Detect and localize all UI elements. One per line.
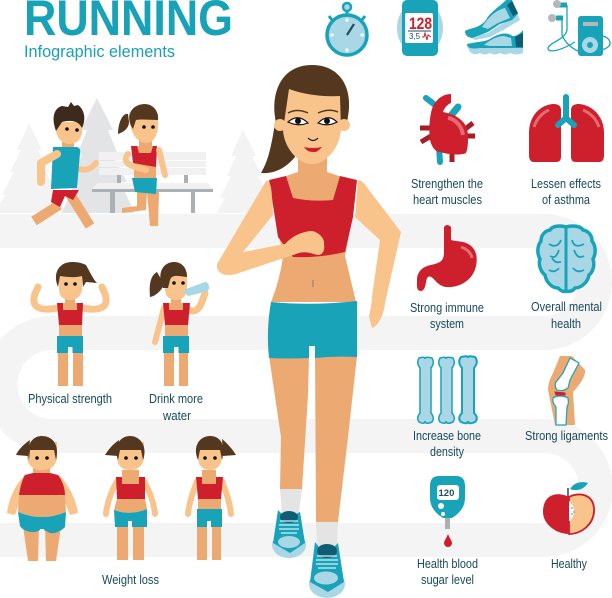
figure: medium woman [105, 436, 155, 560]
figure: overweight woman [7, 436, 78, 561]
label: brain: health [551, 317, 581, 331]
figure: physical strength [34, 262, 106, 386]
label: drink more water: Drink more [149, 392, 203, 406]
illustration: runners in park [0, 98, 275, 226]
icon: fitness watch: 3,5 [409, 32, 421, 41]
label: physical strength: Physical strength [28, 392, 112, 406]
water bottle [183, 282, 209, 296]
icon: apple [543, 482, 594, 534]
icon: knee [548, 356, 585, 425]
label: lungs [531, 177, 601, 207]
label: glucose meter [417, 557, 478, 587]
figure: drink more water [150, 262, 209, 386]
label: heart [411, 177, 483, 207]
right arm [355, 180, 401, 328]
left shoe [272, 510, 306, 558]
label: stomach [410, 301, 484, 331]
label: drink more water [149, 392, 203, 423]
label: brain [531, 300, 602, 331]
bench [92, 152, 213, 213]
icon: lungs [529, 97, 604, 162]
navel [312, 280, 314, 287]
man runner [34, 102, 96, 226]
face [274, 89, 350, 164]
icon: glucose meter: 120 [438, 488, 454, 499]
icon: brain [538, 226, 595, 292]
label: bones [413, 429, 481, 459]
label: bones: Increase bone [413, 429, 481, 443]
torso [271, 158, 356, 302]
legs [269, 356, 357, 522]
label: brain: Overall mental [531, 300, 602, 314]
label: heart: heart muscles [413, 193, 482, 207]
label: stomach: system [430, 317, 464, 331]
left arm [217, 181, 324, 275]
ponytail and hair [261, 118, 295, 173]
icon: music player with earphones [548, 0, 610, 56]
figure: slim woman [188, 436, 236, 560]
main woman figure [217, 65, 401, 598]
label: lungs: Lessen effects [531, 177, 601, 191]
icon: heart [420, 94, 475, 162]
icon: glucose meter [430, 476, 465, 547]
winding background path [0, 231, 596, 540]
label: weight loss: Weight loss [102, 573, 159, 587]
right shoe [309, 542, 345, 598]
icon: stopwatch [327, 3, 367, 55]
label: glucose meter: Health blood [417, 557, 478, 571]
icon: bones [418, 356, 477, 423]
subtitle: Infographic elements [24, 42, 175, 61]
icon: fitness watch: 128 [409, 14, 432, 33]
label: glucose meter: sugar level [421, 573, 474, 587]
socks [280, 489, 338, 546]
icon: fitness watch [397, 0, 443, 56]
shorts [268, 301, 357, 358]
woman runner [118, 104, 165, 226]
label: drink more water: water [162, 409, 191, 423]
label: lungs: of asthma [542, 193, 590, 207]
label: stomach: Strong immune [410, 301, 484, 315]
icon: running shoes [465, 0, 523, 54]
label: heart: Strengthen the [411, 177, 483, 191]
trees [0, 98, 275, 213]
label: bones: density [430, 445, 465, 459]
icon: stomach [417, 225, 477, 291]
red crop top [269, 176, 357, 257]
label: apple: Healthy [551, 557, 588, 571]
